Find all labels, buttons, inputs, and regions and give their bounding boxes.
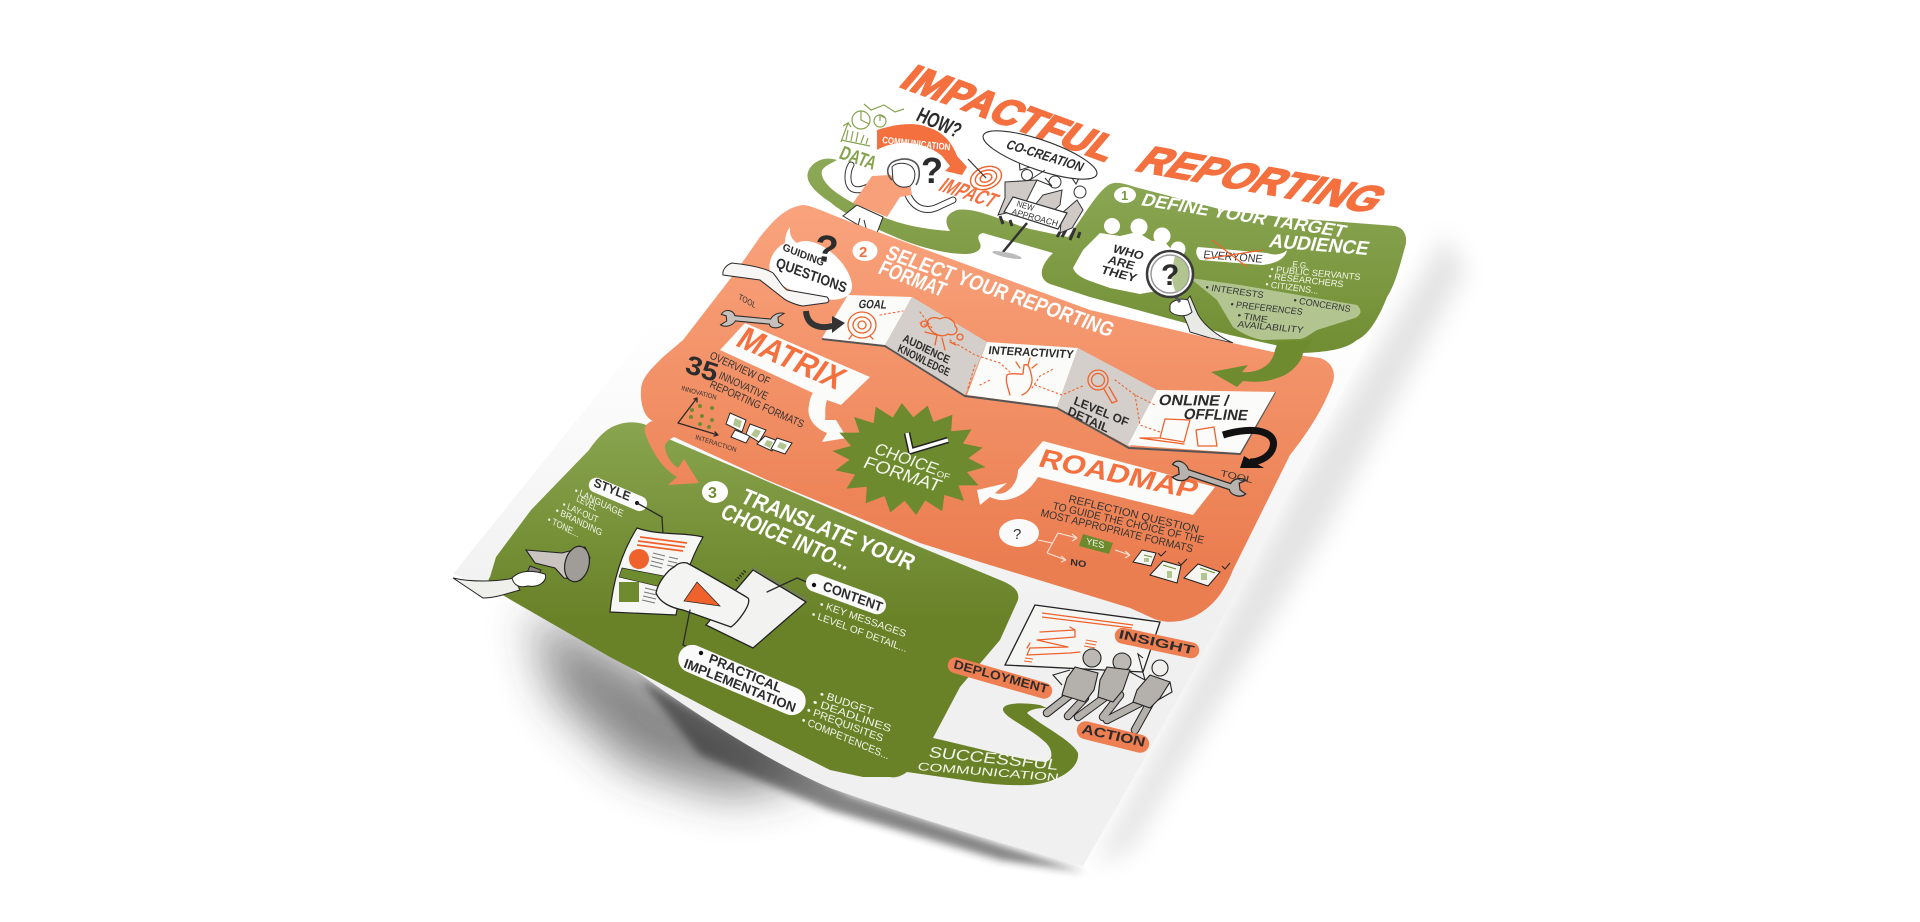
beam text: AVAILABILITY bbox=[1237, 319, 1305, 335]
title bbox=[892, 58, 1396, 221]
heading: define your target audience bbox=[1138, 190, 1372, 260]
flow: question to formats bbox=[999, 519, 1230, 586]
pill: practical implementation: PRACTICAL bbox=[707, 651, 784, 696]
arrow: communication bbox=[877, 124, 967, 175]
list: e.g. audiences: • CITIZENS... bbox=[1265, 279, 1319, 296]
icon: magnifier held in hand bbox=[1147, 251, 1233, 343]
flow: question to formats: YES bbox=[1086, 536, 1105, 550]
title: REPORTING bbox=[1126, 140, 1396, 221]
intro illustration: data, communication, woman, impact bbox=[836, 104, 1005, 233]
icon: hand bbox=[723, 263, 829, 306]
heading: translate your choice into: CHOICE INTO... bbox=[717, 499, 856, 575]
text: reflection question: REFLECTION QUESTION bbox=[1067, 493, 1200, 536]
beam text bbox=[1205, 282, 1352, 335]
figures bbox=[998, 170, 1086, 240]
icon: wrench right with label bbox=[1170, 456, 1254, 502]
badge: choice of format: CHOICE bbox=[871, 440, 942, 478]
poster shadow bbox=[530, 235, 1465, 872]
list: style: • LANGUAGE bbox=[573, 486, 625, 520]
text: how: HOW? bbox=[913, 104, 965, 143]
text: impact: IMPACT bbox=[934, 175, 1003, 212]
text: who are they: ARE bbox=[1106, 254, 1137, 273]
heading: define your target audience: AUDIENCE bbox=[1267, 230, 1372, 260]
folded accordion bbox=[822, 295, 1275, 454]
tag: insight bbox=[1113, 626, 1201, 660]
text: co-creation: CO-CREATION bbox=[1003, 137, 1087, 174]
pill: practical implementation: IMPLEMENTATION bbox=[682, 656, 798, 715]
tag: action: ACTION bbox=[1080, 721, 1147, 750]
icon: question mark: ? bbox=[921, 150, 943, 191]
stat: 35 formats: 35 bbox=[682, 349, 722, 388]
text: successful communication: SUCCESSFUL bbox=[927, 744, 1060, 774]
fold panel audience: AUDIENCE bbox=[901, 333, 952, 367]
flow: question to formats: ? bbox=[1013, 526, 1021, 543]
pill: content bbox=[803, 571, 889, 617]
title: IMPACTFUL bbox=[892, 58, 1129, 168]
heading number 1: 1 bbox=[1121, 188, 1128, 203]
arrow: dark curved to goal bbox=[806, 311, 845, 333]
list: implementation: • BUDGET bbox=[818, 688, 875, 718]
bubble: guiding questions bbox=[769, 227, 852, 300]
pill: style: STYLE bbox=[592, 475, 633, 504]
icon: wrench left with label: TOOL bbox=[737, 292, 757, 310]
badge: choice of format bbox=[827, 396, 991, 522]
list: e.g. audiences: E.G. bbox=[1292, 259, 1309, 271]
arrow: communication: COMMUNICATION bbox=[882, 135, 951, 153]
tag: deployment: DEPLOYMENT bbox=[952, 657, 1050, 696]
fold panel interactivity: INTERACTIVITY bbox=[988, 345, 1075, 361]
audience silhouette bbox=[1073, 218, 1186, 294]
list: style: • LAY-OUT bbox=[561, 500, 599, 526]
icon: wrench right with label: TOOL bbox=[1220, 468, 1254, 485]
list: implementation: • COMPETENCES... bbox=[800, 715, 891, 762]
stat: 35 formats: OVERVIEW OF bbox=[708, 350, 772, 388]
icon: data charts bbox=[841, 104, 904, 146]
section 2 content bbox=[678, 227, 1275, 586]
icon: woman shrugging bbox=[843, 159, 953, 233]
bubble: everyone crossed out: EVERYONE bbox=[1203, 249, 1263, 266]
bubble: guiding questions: ? bbox=[812, 227, 841, 272]
light beam callout bbox=[1190, 278, 1361, 340]
list: style: • TONE... bbox=[546, 515, 580, 540]
icon: wrench left with label bbox=[719, 292, 786, 332]
tag: deployment bbox=[946, 655, 1054, 701]
banner: matrix with arrow bbox=[720, 321, 870, 442]
heading: select your reporting format: FORMAT bbox=[875, 257, 950, 302]
list: style bbox=[546, 486, 625, 540]
flow: question to formats: NO bbox=[1070, 557, 1087, 569]
badge: choice of format: FORMAT bbox=[860, 452, 946, 496]
dotted connectors bbox=[880, 311, 1160, 432]
bubble: guiding questions: QUESTIONS bbox=[774, 256, 849, 297]
board bbox=[1005, 605, 1160, 672]
chart: innovation by interaction scatter bbox=[678, 385, 737, 454]
icon: magnifier held in hand: ? bbox=[1161, 259, 1179, 292]
icons: format cards bbox=[726, 413, 792, 454]
fold panel level of detail bbox=[1057, 348, 1157, 447]
fold panel goal: GOAL bbox=[857, 297, 889, 312]
poster sheet bbox=[453, 60, 1448, 866]
number 2: 2 bbox=[859, 244, 867, 261]
pill: style bbox=[586, 475, 663, 535]
heading: translate your choice into: TRANSLATE YOUR bbox=[737, 484, 920, 575]
banner: matrix with arrow: MATRIX bbox=[730, 321, 853, 396]
tag: insight: INSIGHT bbox=[1117, 627, 1196, 658]
closing illustration: team at board bbox=[916, 605, 1201, 784]
panel: section 2 orange with arrow bbox=[641, 205, 1334, 622]
chart: innovation by interaction scatter: INNOVATION bbox=[681, 385, 717, 402]
pill: practical implementation bbox=[674, 641, 810, 719]
fold panel online offline bbox=[1128, 390, 1275, 453]
bubble: everyone crossed out bbox=[1196, 240, 1287, 267]
heading: select your reporting format: SELECT YOUR REPORTING bbox=[882, 241, 1118, 342]
text: reflection question: TO GUIDE THE CHOICE OF THE bbox=[1051, 500, 1205, 547]
number 3: 3 bbox=[708, 485, 717, 502]
text: successful communication: COMMUNICATION bbox=[916, 761, 1060, 784]
banner: roadmap with arrow: ROADMAP bbox=[1035, 443, 1203, 505]
list: content: • LEVEL OF DETAIL... bbox=[810, 609, 908, 655]
sign: new approach bbox=[992, 197, 1067, 261]
text: who are they: WHO bbox=[1111, 243, 1146, 263]
arrow: green from section 1 into section 2 bbox=[1211, 340, 1312, 387]
fold shadow bbox=[822, 339, 1275, 454]
list: e.g. audiences: • PUBLIC SERVANTS bbox=[1270, 264, 1361, 282]
fold panel audience bbox=[885, 297, 987, 395]
icon: report document bbox=[610, 528, 703, 615]
list: implementation: • DEADLINES bbox=[811, 696, 893, 735]
list: e.g. audiences bbox=[1265, 259, 1361, 296]
list: implementation bbox=[800, 688, 893, 762]
connector lines bbox=[683, 578, 814, 653]
illustration: co-creation group with sign bbox=[978, 121, 1102, 261]
tag: action bbox=[1075, 719, 1151, 755]
banner: roadmap with arrow bbox=[977, 441, 1215, 515]
list: style: • BRANDING bbox=[554, 506, 603, 539]
list: content: • KEY MESSAGES bbox=[818, 599, 908, 640]
text: data: DATA bbox=[836, 142, 880, 175]
fold panel audience: KNOWLEDGE bbox=[896, 343, 951, 379]
figures bbox=[1047, 649, 1172, 730]
fold panel goal bbox=[822, 295, 912, 345]
text: successful communication bbox=[916, 744, 1060, 784]
list: style: LEVEL bbox=[575, 494, 599, 514]
stat: 35 formats: REPORTING FORMATS bbox=[708, 379, 806, 431]
fold panel online offline: ONLINE / bbox=[1157, 392, 1231, 410]
stat: 35 formats bbox=[682, 349, 806, 431]
arrow: black curved bbox=[1223, 430, 1274, 468]
text: who are they: THEY bbox=[1099, 264, 1139, 285]
chart: innovation by interaction scatter: INTERACTION bbox=[695, 434, 737, 454]
sign: new approach: NEW bbox=[1015, 198, 1036, 213]
fold panel level of detail: DETAIL bbox=[1066, 404, 1111, 436]
sign: new approach: APPROACH bbox=[1010, 206, 1060, 228]
panel: section 1 green with ribbon bbox=[807, 159, 1406, 353]
icon: target with arrow bbox=[967, 159, 1005, 194]
stat: 35 formats: INNOVATIVE bbox=[717, 370, 770, 403]
beam text: • TIME bbox=[1237, 310, 1269, 325]
heading: define your target audience: DEFINE YOUR TARGET bbox=[1138, 190, 1350, 241]
bubble: guiding questions: GUIDING bbox=[781, 242, 826, 269]
beam text: • PREFERENCES bbox=[1230, 299, 1304, 317]
text: reflection question: MOST APPROPRIATE FORMATS bbox=[1039, 507, 1194, 555]
list: e.g. audiences: • RESEARCHERS bbox=[1268, 271, 1344, 289]
badge: choice of format: OF bbox=[935, 468, 951, 482]
icon: megaphone in hand bbox=[453, 544, 593, 598]
icon: video card bbox=[656, 563, 749, 627]
fold panel interactivity bbox=[967, 342, 1078, 407]
fold panel level of detail: LEVEL OF bbox=[1072, 394, 1131, 430]
number 2 bbox=[852, 241, 878, 261]
section 3 content bbox=[453, 475, 920, 762]
heading number 1 bbox=[1114, 187, 1136, 203]
panel: section 3 green with ribbon bbox=[489, 422, 1078, 785]
speech bubble bbox=[978, 121, 1102, 189]
icon: notebook bbox=[706, 568, 807, 648]
fold panel online offline: OFFLINE bbox=[1182, 406, 1250, 424]
beam text: • CONCERNS bbox=[1293, 295, 1352, 314]
beam text: • INTERESTS bbox=[1205, 282, 1265, 300]
text: who are they bbox=[1099, 243, 1146, 285]
list: implementation: • PREQUISITES bbox=[805, 704, 885, 745]
number 3 bbox=[702, 481, 728, 503]
pill: content: CONTENT bbox=[821, 579, 885, 615]
